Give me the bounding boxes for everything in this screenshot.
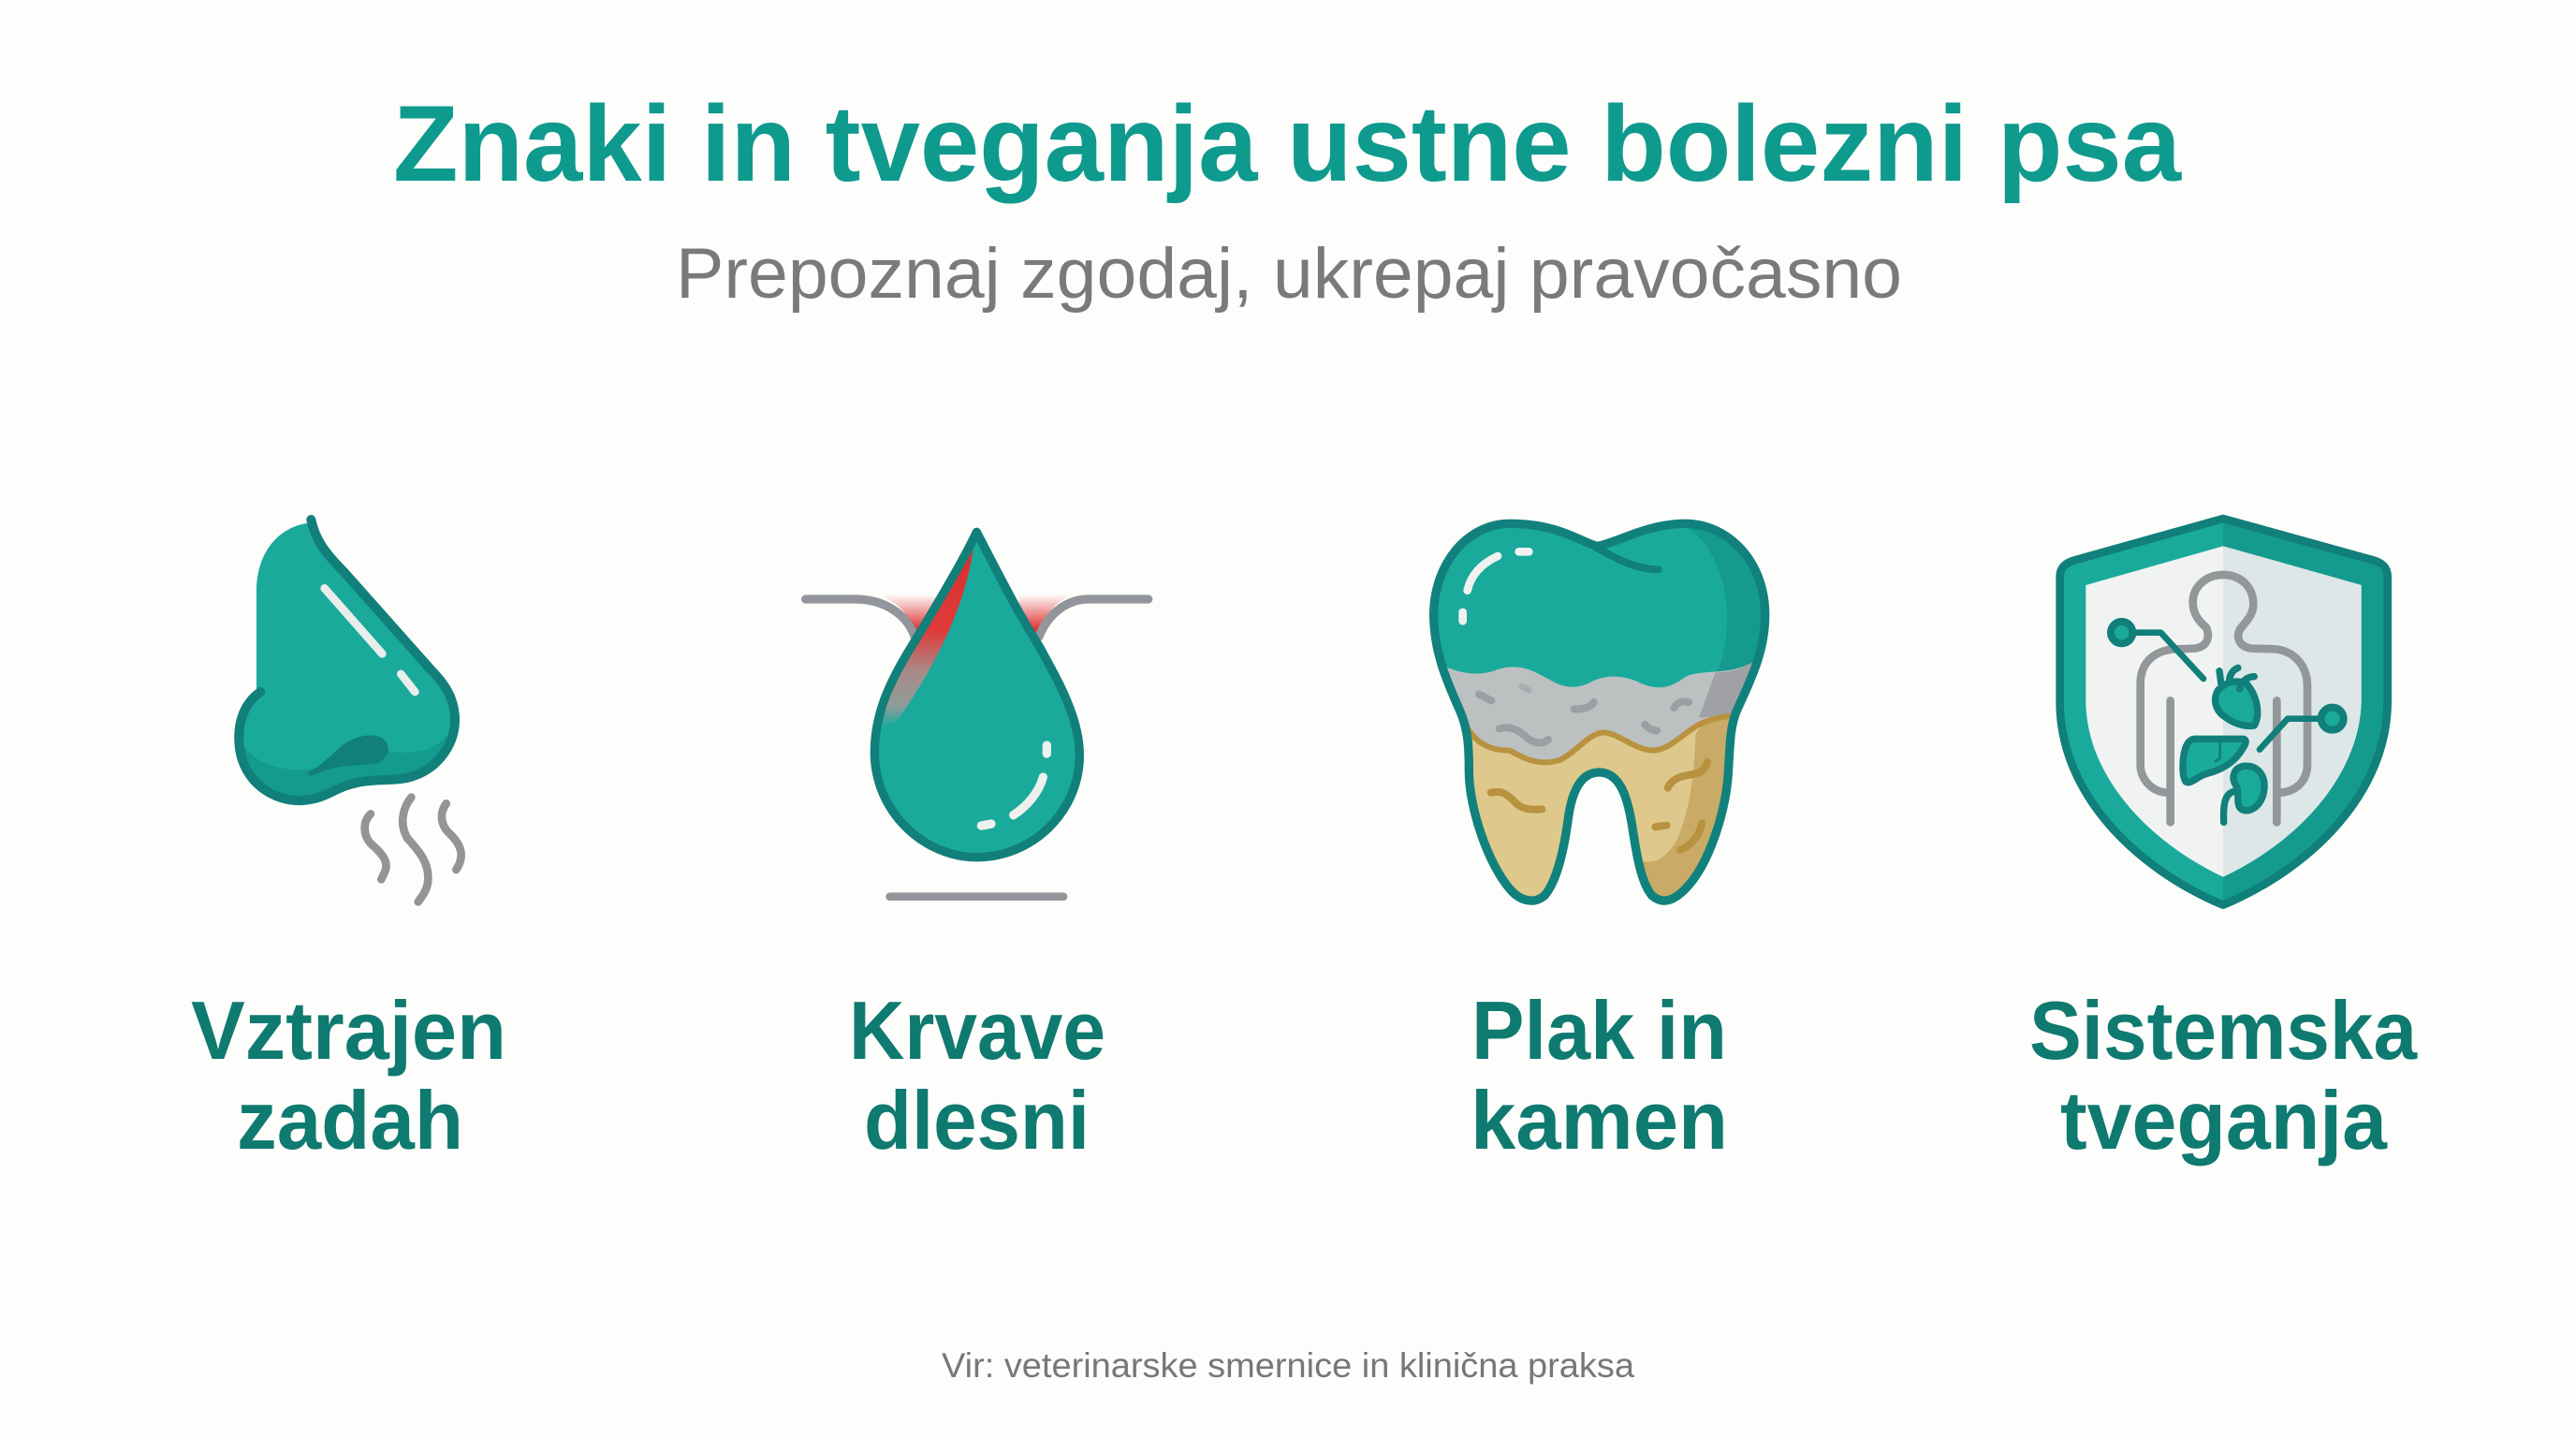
label: Sistemska tveganja [2029,984,2418,1167]
panel: persistent bad breath [191,520,506,1167]
label: Vztrajen zadah [191,984,506,1167]
label: Krvave dlesni [849,984,1105,1167]
title: Znaki in tveganja ustne bolezni psa [393,84,2182,204]
label: Plak in kamen [1471,984,1728,1167]
label: Sistemska tveganja: tveganja [2060,1074,2388,1167]
icon: nose with odour [238,520,461,902]
panel: systemic risks [2029,519,2418,1167]
label: Plak in kamen: Plak in [1471,984,1727,1077]
label: Krvave dlesni: dlesni [864,1074,1090,1167]
source note: Vir: veterinarske smernice in klinična praksa [942,1346,1634,1385]
icon: shield with body and organs [2060,519,2388,905]
label: Sistemska tveganja: Sistemska [2029,984,2418,1077]
label: Vztrajen zadah: zadah [237,1074,463,1167]
panel: bleeding gums [806,532,1149,1167]
subtitle: Prepoznaj zgodaj, ukrepaj pravočasno [676,234,1902,314]
panel: plaque and tartar [1429,518,1772,1167]
label: Krvave dlesni: Krvave [849,984,1105,1077]
label: Vztrajen zadah: Vztrajen [191,984,506,1077]
infographic canvas [191,103,2418,1384]
label: Plak in kamen: kamen [1471,1074,1728,1167]
icon: blood drop on gum line [806,532,1149,897]
icon: tooth with plaque and tartar [1429,518,1772,908]
